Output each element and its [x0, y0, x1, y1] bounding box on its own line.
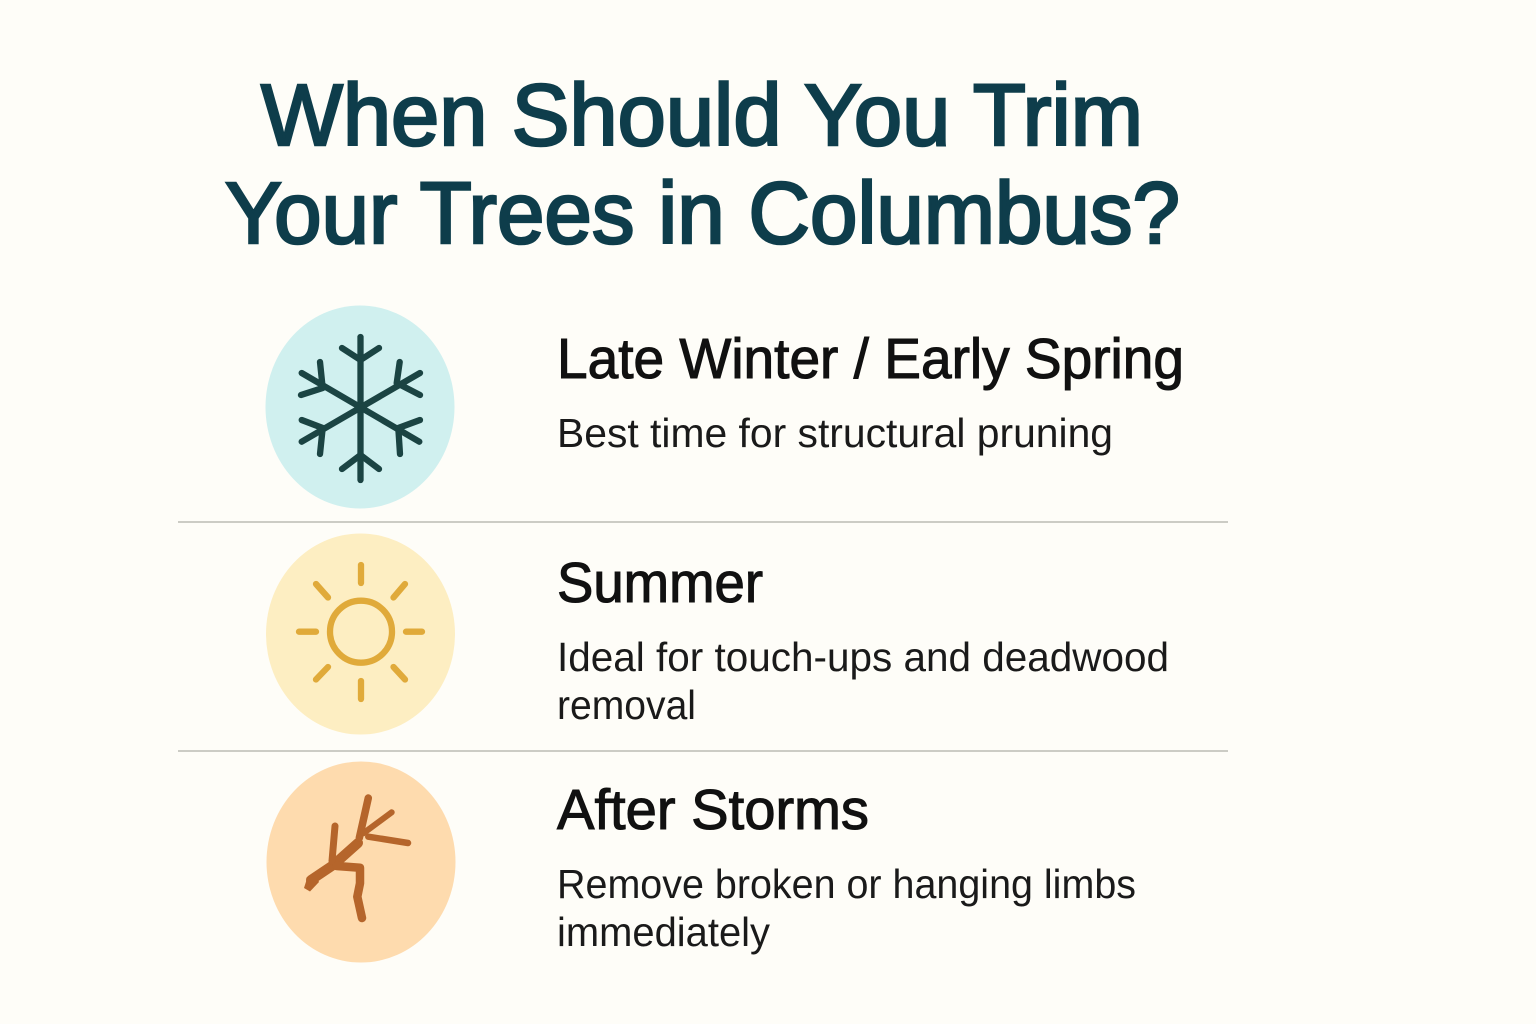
panel: late winter / early spring [266, 306, 1184, 508]
title: When Should You Trim [261, 67, 1143, 164]
text: after storms description: Remove broken or hanging limbs [557, 861, 1136, 907]
icon: broken branch [266, 762, 456, 962]
icon: sun [266, 534, 455, 734]
text: summer description: Ideal for touch-ups and deadwood [557, 634, 1169, 680]
panel: summer [266, 534, 1169, 734]
text: summer description: removal [557, 682, 696, 728]
heading: after storms: After Storms [557, 778, 869, 842]
text: late winter description: Best time for structural pruning [557, 410, 1113, 456]
icon: snowflake [266, 306, 454, 508]
title: Your Trees in Columbus? [225, 165, 1180, 262]
text: after storms description [557, 861, 1136, 955]
text: after storms description: immediately [557, 909, 770, 955]
snapped branch end [304, 873, 319, 892]
title [225, 67, 1180, 262]
heading: late winter: Late Winter / Early Spring [557, 327, 1184, 391]
text: summer description [557, 634, 1169, 728]
heading: summer: Summer [557, 551, 763, 615]
panel: after storms [266, 762, 1136, 962]
